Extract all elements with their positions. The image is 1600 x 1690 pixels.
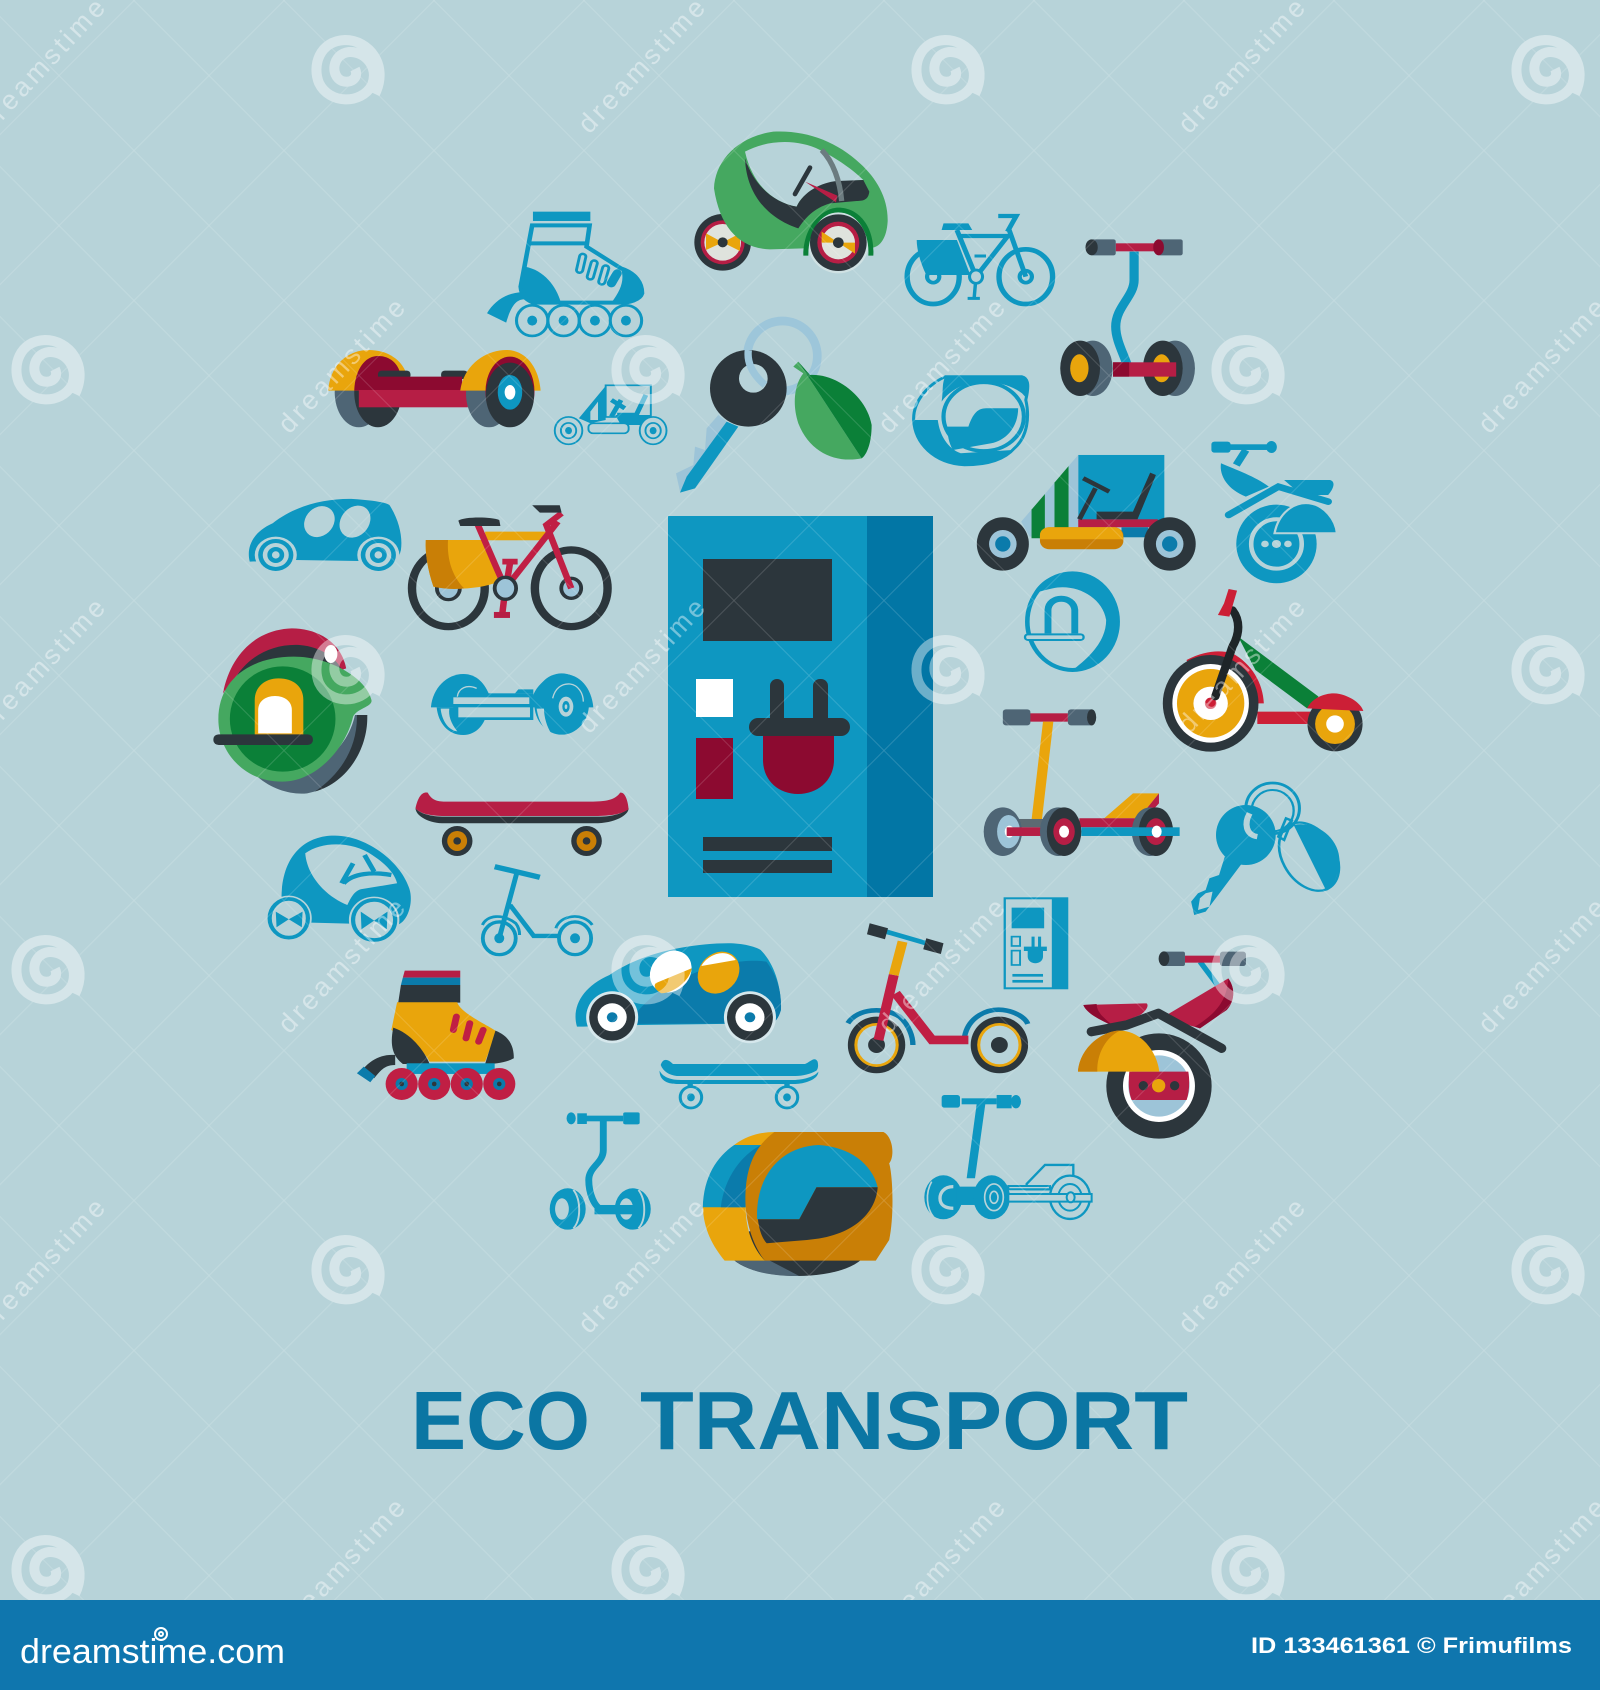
footer logo text: dreamstime.com [20, 1633, 285, 1671]
watermark overlay: dreamstime [572, 593, 711, 739]
icon: bubble car outline [266, 836, 411, 943]
kiosk screen [703, 559, 832, 641]
watermark overlay: dreamstime [872, 893, 1011, 1039]
title: ECO [411, 1374, 590, 1467]
icon: keys outline [1191, 783, 1351, 915]
icon: car outline [249, 499, 401, 573]
footer credit: ID 133461361 © Frimufilms [1251, 1633, 1572, 1658]
icon: hoverboard red [328, 350, 541, 427]
icon: red one-wheel motorbike [1078, 951, 1246, 1139]
title [411, 1374, 1188, 1467]
icon: colored helmet [703, 1132, 892, 1276]
icon: red skateboard [415, 793, 629, 856]
icon: blue skateboard outline [660, 1059, 818, 1108]
icon: one-wheel outline [1025, 573, 1120, 671]
icon: kick scooter outline [482, 867, 592, 955]
footer logo spiral [155, 1628, 167, 1640]
icon: one-wheel motorbike outline [1211, 441, 1337, 583]
icon: small go-kart outline [555, 385, 667, 444]
watermark overlay: dreamstime [272, 293, 411, 439]
kiosk plug [749, 679, 850, 794]
kiosk white button [696, 679, 733, 717]
icon: colored roller skate [357, 971, 515, 1100]
icon: colored scooter [984, 709, 1180, 856]
icon: go-kart colored [977, 455, 1196, 571]
icon: hoverboard outline [431, 673, 593, 735]
watermark overlay: dreamstime [872, 1493, 1011, 1639]
watermark overlay: dreamstime [1172, 1193, 1311, 1339]
icon: segway [1060, 239, 1195, 396]
icon: tricycle [1163, 589, 1363, 752]
icon: colored car [576, 943, 781, 1043]
watermark overlay: dreamstime [572, 1193, 711, 1339]
watermark overlay: dreamstime [1172, 593, 1311, 739]
icon: kids scooter colored [848, 923, 1028, 1073]
icon: small kiosk outline [1005, 898, 1067, 989]
icon: scooter outline [924, 1095, 1092, 1219]
icon: key with leaf fob [676, 321, 872, 493]
icon: blue bicycle outline [907, 216, 1053, 304]
icon: segway outline [550, 1112, 651, 1230]
watermark overlay: dreamstime [272, 893, 411, 1039]
kiosk slot lines [703, 837, 832, 873]
panel: charging kiosk [668, 516, 933, 897]
icon: green electric car [694, 132, 888, 273]
watermark overlay: dreamstime [272, 1493, 411, 1639]
icon: helmet outline [914, 377, 1028, 465]
title: TRANSPORT [640, 1374, 1188, 1467]
watermark overlay: dreamstime [872, 293, 1011, 439]
icon: one-wheel green [213, 628, 372, 794]
icon: cargo bicycle colored [412, 505, 608, 627]
kiosk red panel [696, 738, 733, 799]
icon: roller skate outline [487, 212, 642, 336]
footer bar [0, 1600, 1600, 1690]
